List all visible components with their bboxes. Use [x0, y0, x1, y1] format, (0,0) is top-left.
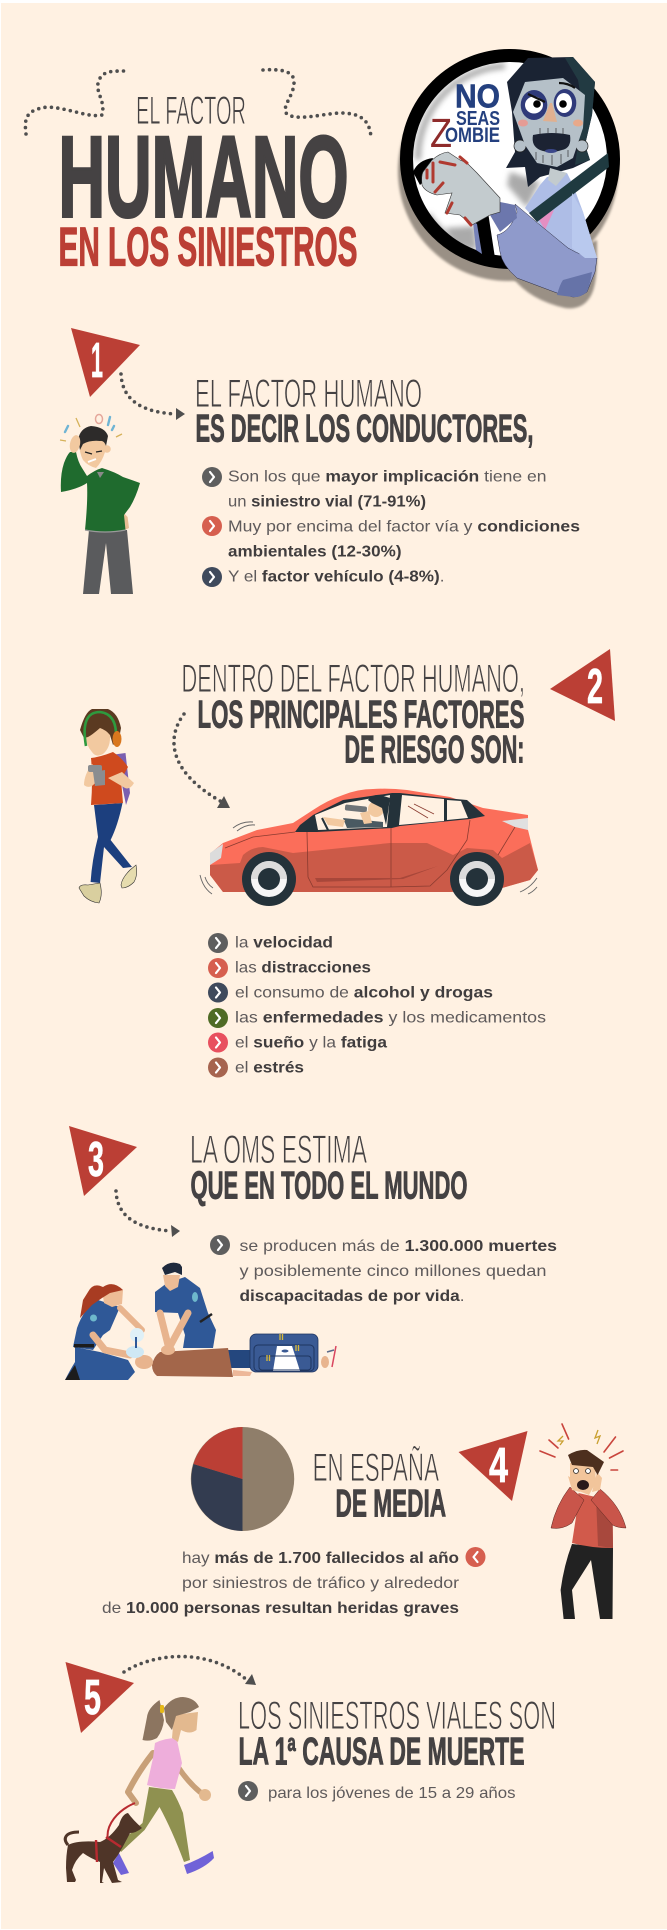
dotted arrow [174, 714, 230, 808]
heading: QUE EN TODO EL MUNDO [190, 1164, 468, 1208]
bullet 1 text [228, 468, 546, 510]
panel: header [25, 56, 618, 308]
panel: section 3 [65, 1126, 557, 1380]
bullet 1 text: un siniestro vial (71-91%) [228, 494, 426, 510]
bullet 2 text: ambientales (12-30%) [228, 544, 402, 560]
paramedic man [155, 1263, 216, 1355]
title line 3: EN LOS SINIESTROS [58, 216, 358, 278]
bullet marker grey [202, 467, 222, 487]
heading: DE MEDIA [336, 1482, 446, 1526]
icon: zombie driver badge: Z [430, 110, 452, 156]
bullet text [210, 1235, 557, 1305]
illustration: paramedics performing CPR [65, 1263, 336, 1380]
text block: por siniestros de tráfico y alrededor [182, 1575, 460, 1592]
bullet marker navy [202, 567, 222, 587]
number badge 5 [66, 1662, 134, 1733]
heading: EN ESPAÑA [313, 1445, 439, 1490]
bullet text [238, 1781, 516, 1802]
text block: hay más de 1.700 fallecidos al año [182, 1550, 459, 1567]
number badge 4 [458, 1431, 528, 1501]
pie chart [191, 1427, 294, 1531]
number badge 3 [69, 1126, 137, 1196]
bullet text: discapacitadas de por vida . [240, 1288, 464, 1305]
number badge 2: 2 [587, 660, 603, 714]
dotted arrow [116, 1191, 180, 1237]
sleeve [497, 204, 597, 297]
icon: zombie driver badge [398, 56, 618, 308]
hand [422, 152, 500, 225]
panel: section 4 [102, 1424, 626, 1619]
number badge 5: 5 [84, 1671, 101, 1725]
bullet marker red [202, 516, 222, 536]
heading [190, 1128, 468, 1208]
item: la velocidad: la velocidad [235, 934, 333, 952]
heading [238, 1694, 556, 1774]
item: alcohol y drogas: el consumo de alcohol y drogas [235, 984, 493, 1002]
medical bag [250, 1334, 318, 1372]
paramedic woman [65, 1284, 144, 1380]
text block: de 10.000 personas resultan heridas graves [102, 1600, 459, 1617]
icon: zombie driver badge: SEAS [456, 107, 500, 130]
bullet 2 text [228, 518, 580, 560]
dotted arrow [121, 374, 185, 420]
text block [102, 1550, 460, 1617]
dotted arrow [124, 1656, 256, 1685]
illustration: girl walking dog [65, 1697, 214, 1883]
heading [195, 372, 534, 450]
illustration: pedestrian with phone [79, 709, 137, 903]
neck and shirt [525, 173, 597, 272]
item: las distracciones [208, 958, 371, 978]
panel: section 1 [60, 328, 580, 594]
decorative dotted line right [263, 70, 371, 138]
bullet 1 text: Son los que mayor implicación tiene en [228, 468, 546, 486]
heading [313, 1445, 446, 1526]
illustration: scared man [540, 1424, 626, 1619]
illustration: stressed man [60, 414, 140, 594]
bullet marker [466, 1547, 486, 1567]
decorative dotted line left [25, 71, 125, 134]
bullet 2 text: Muy por encima del factor vía y condiciones [228, 518, 580, 536]
patient [135, 1346, 336, 1377]
bullet 3 text: Y el factor vehículo (4-8%) . [228, 568, 444, 586]
panel: section 5 [65, 1656, 556, 1883]
heading: DE RIESGO SON: [344, 728, 524, 772]
illustration: red car with driver [200, 789, 538, 906]
item: estrés [208, 1058, 304, 1078]
face [513, 78, 585, 167]
bullet text: para los jóvenes de 15 a 29 años [268, 1785, 516, 1802]
heading: LA OMS ESTIMA [190, 1128, 367, 1172]
heading: EL FACTOR HUMANO [195, 372, 422, 416]
badge text: NO [455, 78, 500, 114]
number badge 3: 3 [88, 1133, 104, 1187]
number badge 4: 4 [489, 1439, 508, 1493]
bullet text: y posiblemente cinco millones quedan [240, 1263, 546, 1280]
item: las distracciones: las distracciones [235, 960, 371, 976]
number badge 2 [550, 649, 615, 721]
ears [514, 140, 526, 152]
panel: section 2 [79, 649, 615, 1078]
steering wheel [413, 158, 495, 258]
seatbelt [529, 153, 609, 222]
item: enfermedades: las enfermedades y los medicamentos [235, 1010, 546, 1026]
heading [182, 657, 525, 772]
number badge 1 [71, 328, 140, 397]
number badge 1: 1 [91, 334, 103, 388]
risk factor list [208, 933, 546, 1078]
panel: header: EL FACTOR [136, 89, 246, 133]
item: la velocidad [208, 933, 333, 953]
icon: zombie driver badge: OMBIE [445, 124, 500, 147]
item: sueño y fatiga: el sueño y la fatiga [235, 1034, 387, 1052]
bullet text: se producen más de 1.300.000 muertes [240, 1238, 557, 1255]
item: estrés: el estrés [235, 1060, 304, 1076]
hair [506, 57, 595, 187]
title line 2: HUMANO [58, 114, 348, 242]
bullet list [202, 467, 580, 587]
